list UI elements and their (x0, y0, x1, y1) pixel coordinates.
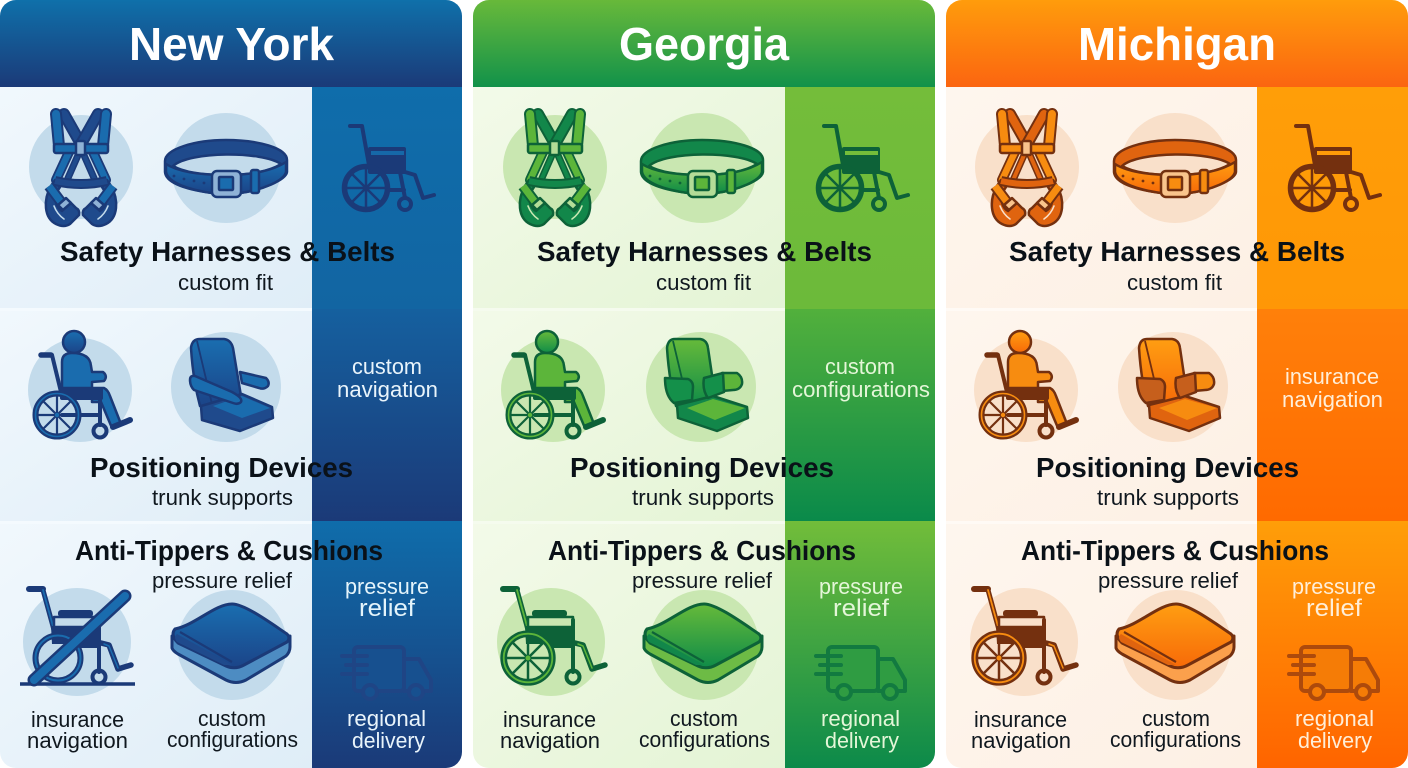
side label: custom navigation: custom (352, 354, 422, 379)
row sublabel: pressure relief (632, 568, 773, 593)
icon: cushion (172, 590, 290, 700)
row sublabel: trunk supports (1097, 485, 1239, 510)
label: custom configurations (167, 706, 298, 752)
icon: wheelchair (818, 126, 908, 210)
panel background: Michigan (946, 0, 1408, 768)
icon: anti-tipper wheelchair (20, 588, 135, 696)
side label: custom configurations (792, 354, 930, 402)
side label: pressure relief: relief (833, 595, 889, 622)
icon: wheelchair (497, 588, 605, 696)
label: insurance navigation: insurance (503, 707, 596, 732)
label: regional delivery: regional (347, 706, 426, 731)
side label: pressure relief: relief (359, 595, 415, 622)
side label: pressure relief: pressure (1292, 574, 1376, 599)
icon: delivery truck (816, 647, 905, 699)
label: regional delivery (1295, 706, 1374, 753)
icon: delivery truck (342, 647, 431, 699)
label: regional delivery: delivery (825, 728, 899, 753)
label: custom configurations: configurations (1110, 727, 1241, 752)
label: custom configurations: custom (198, 706, 266, 731)
heading: Georgia: Georgia (619, 18, 789, 70)
row heading: Safety Harnesses & Belts (537, 236, 872, 267)
side label: pressure relief (345, 574, 429, 622)
row heading: Positioning Devices (570, 452, 834, 483)
icon: safety harness (975, 114, 1079, 226)
icon: safety harness (503, 114, 607, 226)
row sublabel: pressure relief (1098, 568, 1239, 593)
label: regional delivery (821, 706, 900, 753)
panel: Georgia (473, 0, 935, 768)
icon: person in wheelchair (974, 331, 1078, 442)
label: custom configurations: configurations (639, 727, 770, 752)
icon: delivery truck (1289, 647, 1378, 699)
icon: cushion (644, 590, 762, 700)
icon: safety harness (29, 114, 133, 226)
label: regional delivery (347, 706, 426, 753)
label: insurance navigation: insurance (31, 707, 124, 732)
side label: pressure relief (819, 574, 903, 622)
label: custom configurations (639, 706, 770, 752)
panel: New York (0, 0, 462, 768)
label: insurance navigation: navigation (971, 728, 1071, 753)
label: regional delivery: delivery (352, 728, 425, 753)
row heading: Positioning Devices (1036, 452, 1299, 483)
heading: Michigan: Michigan (1078, 18, 1276, 70)
icon: positioning seat with pads (646, 332, 756, 442)
icon: wheelchair (1290, 126, 1380, 210)
label: custom configurations (1110, 706, 1241, 752)
side label: pressure relief: pressure (345, 574, 429, 599)
icon: person in wheelchair (28, 331, 132, 442)
label: regional delivery: regional (821, 706, 900, 731)
label: insurance navigation: insurance (974, 707, 1067, 732)
row heading: Positioning Devices (90, 452, 353, 483)
row heading: Safety Harnesses & Belts (60, 236, 395, 267)
side label: pressure relief: pressure (819, 574, 903, 599)
panel background: New York (0, 0, 462, 768)
row sublabel: trunk supports (632, 485, 774, 510)
side label: insurance navigation: navigation (1282, 387, 1383, 412)
side label: pressure relief: relief (1306, 595, 1362, 622)
label: regional delivery: delivery (1298, 728, 1372, 753)
label: custom configurations: configurations (167, 727, 298, 752)
label: insurance navigation: navigation (27, 728, 128, 753)
label: insurance navigation (500, 707, 600, 753)
panel: Michigan (946, 0, 1408, 768)
icon: positioning seat with pads (1118, 332, 1228, 442)
icon: belt (1114, 113, 1236, 223)
row sublabel: custom fit (178, 270, 273, 295)
row sublabel: custom fit (656, 270, 751, 295)
row sublabel: trunk supports (152, 485, 293, 510)
icon: cushion (1116, 590, 1234, 700)
side label: custom navigation (337, 354, 438, 402)
label: insurance navigation: navigation (500, 728, 600, 753)
row heading: Anti-Tippers & Cushions (548, 535, 856, 566)
row heading: Safety Harnesses & Belts (1009, 236, 1345, 267)
label: custom configurations: custom (1142, 706, 1210, 731)
icon: wheelchair (970, 588, 1078, 696)
side label: custom configurations: custom (825, 354, 895, 379)
side label: custom navigation: navigation (337, 377, 438, 402)
side label: pressure relief (1292, 574, 1376, 622)
label: insurance navigation (27, 707, 128, 753)
row sublabel: custom fit (1127, 270, 1222, 295)
side label: custom configurations: configurations (792, 377, 930, 402)
icon: positioning seat (171, 332, 281, 442)
label: regional delivery: regional (1295, 706, 1374, 731)
row heading: Anti-Tippers & Cushions (1021, 535, 1329, 566)
icon: person in wheelchair (501, 331, 605, 442)
row sublabel: pressure relief (152, 568, 293, 593)
icon: belt (165, 113, 287, 223)
side label: insurance navigation (1282, 364, 1383, 412)
row heading: Anti-Tippers & Cushions (75, 535, 383, 566)
panel background: Georgia (473, 0, 935, 768)
icon: belt (641, 113, 763, 223)
label: insurance navigation (971, 707, 1071, 753)
heading: New York: New York (129, 18, 334, 70)
side label: insurance navigation: insurance (1285, 364, 1379, 389)
label: custom configurations: custom (670, 706, 738, 731)
icon: wheelchair (344, 126, 434, 210)
